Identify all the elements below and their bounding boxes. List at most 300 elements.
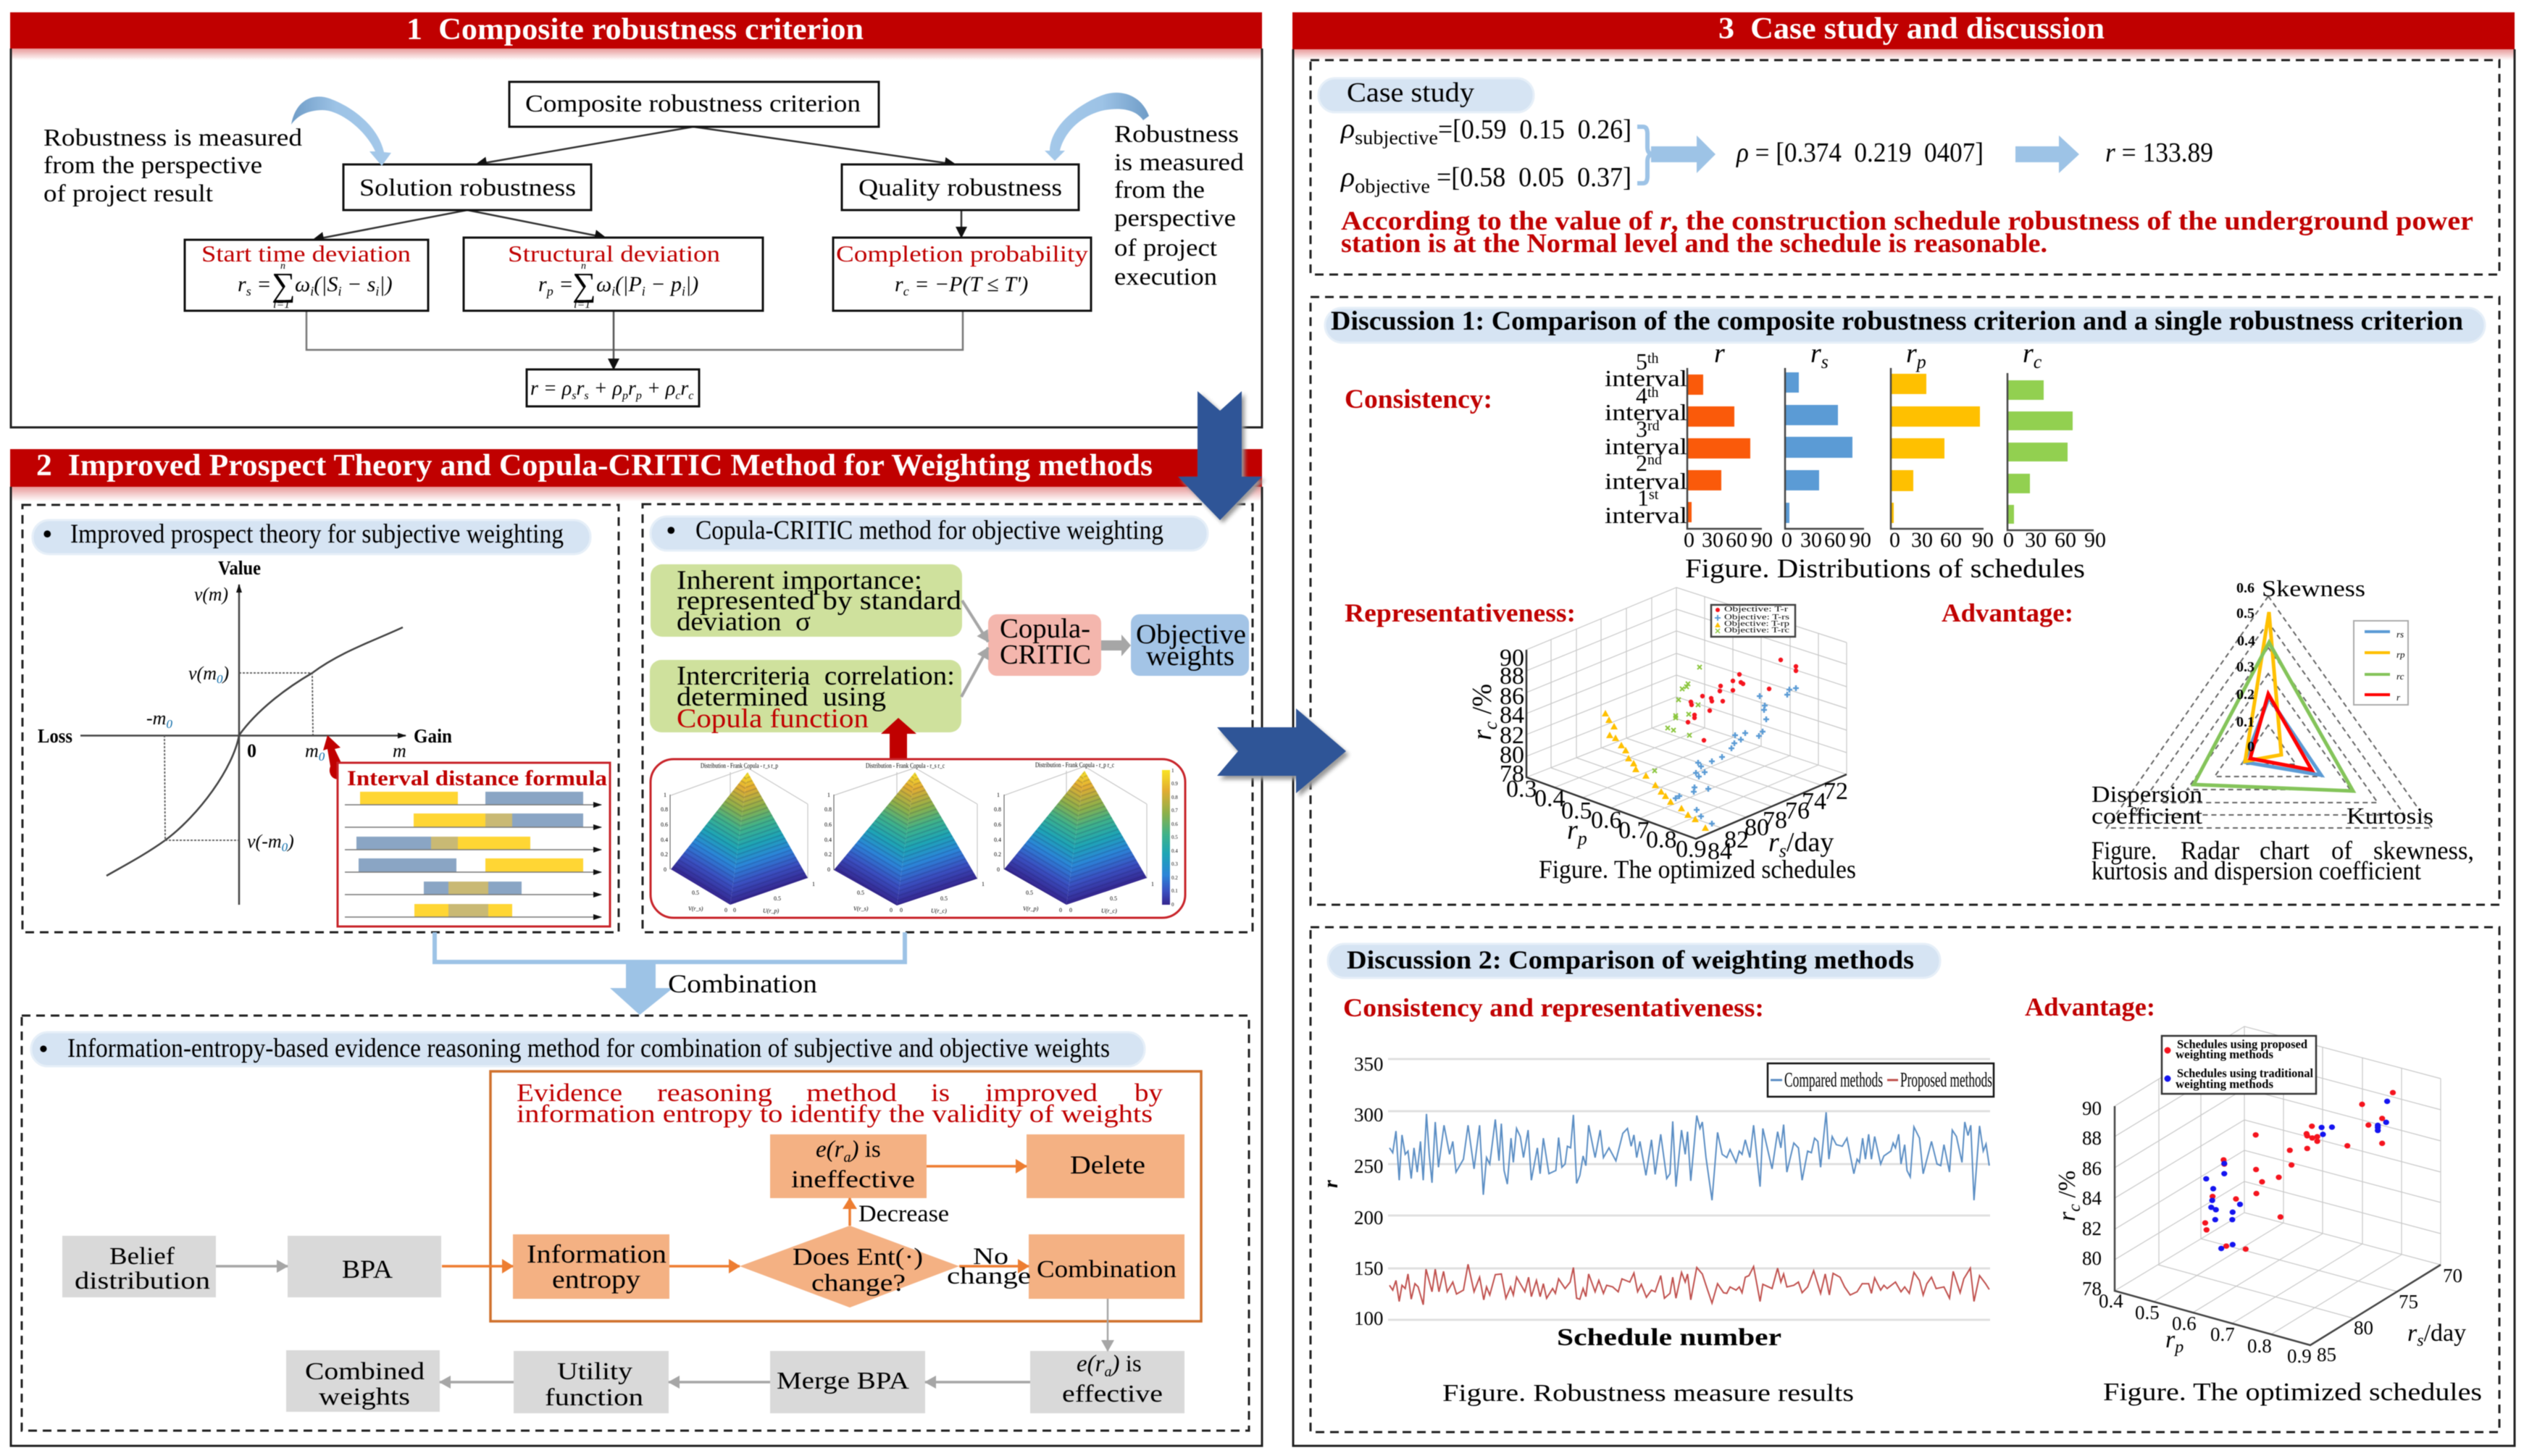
weights: objective: =[0.58 0.05 0.37] — [1437, 162, 1631, 193]
box: completion probability: r — [895, 272, 903, 296]
bars: rs: 90 — [1850, 528, 1871, 552]
arrows to copula-critic — [961, 601, 988, 697]
chart: value function: v(-m — [247, 831, 282, 852]
box: start time deviation: (|S — [314, 272, 338, 296]
axis ticks: 86 — [2082, 1158, 2102, 1179]
box: BPA: BPA — [342, 1255, 393, 1284]
caption: kurtosis and dispersion coefficient — [2092, 856, 2421, 885]
axis labels — [2092, 575, 2433, 829]
panel 1 header — [10, 12, 1262, 60]
bars: rc — [2003, 338, 2106, 552]
box: structural deviation: |) — [685, 272, 698, 296]
bars: rs: r — [1810, 338, 1821, 369]
surface 1: 0.4 — [661, 837, 668, 843]
axis ticks: 200 — [1354, 1207, 1384, 1229]
box: copula-critic: CRITIC — [1000, 640, 1091, 670]
box: structural deviation: r — [538, 272, 547, 296]
box: utility function: function — [545, 1384, 643, 1411]
interval labels: 4 — [1636, 382, 1647, 409]
axis ticks: 78 — [1763, 807, 1787, 834]
caption: of — [2331, 836, 2352, 865]
chart: value function — [38, 557, 452, 905]
box: ineffective: is — [858, 1137, 881, 1163]
box: solution robustness — [343, 164, 591, 210]
box: combination — [1029, 1234, 1184, 1299]
series: objective T-rs (blue) — [1673, 685, 1799, 827]
box: structural deviation: n — [581, 261, 586, 272]
box: objective weights: Objective — [1136, 619, 1246, 650]
heading: case study: Case study — [1347, 78, 1474, 108]
box: start time deviation: |) — [379, 272, 393, 296]
axis ticks: 0.7 — [2210, 1323, 2235, 1345]
chart: value function: m — [305, 740, 319, 761]
bars: rp: 60 — [1940, 528, 1962, 552]
arrow: section 2 to section 3 — [1217, 708, 1346, 793]
box: structural deviation: ∑ — [572, 266, 596, 303]
axis ticks: 84 — [1500, 702, 1524, 729]
bars: rs: 60 — [1824, 528, 1846, 552]
interval labels: th — [1647, 385, 1659, 401]
box: composite robustness criterion — [509, 82, 879, 127]
axis ticks: 82 — [1500, 722, 1524, 749]
axis ticks: 75 — [2399, 1291, 2418, 1313]
note: evidence reasoning improvement: information entropy to identify the validity of weights — [517, 1100, 1153, 1128]
arrow: section 1 to section 2 — [1178, 391, 1262, 520]
box: ineffective — [770, 1134, 927, 1198]
axis labels: c — [2065, 1204, 2084, 1212]
legend: Schedules using proposed — [2177, 1037, 2308, 1051]
surface 3 — [994, 761, 1154, 914]
series: proposed methods — [1390, 1264, 1989, 1305]
series: objective T-rc (green) — [1652, 665, 1702, 773]
axis ticks: 72 — [1823, 778, 1848, 805]
icon: red pointer arrow — [323, 735, 344, 779]
heading: discussion 1: Discussion 1: Comparison of the composite robustness criterion and a single robustness criterion — [1331, 306, 2463, 336]
box: composite formula: s — [584, 390, 589, 402]
box: information entropy — [513, 1234, 669, 1299]
grey flow arrows — [216, 1266, 1108, 1382]
box: intercriteria correlation — [650, 660, 961, 734]
box: structural deviation: p — [546, 284, 553, 298]
box: structural deviation: i — [611, 284, 615, 298]
bars: r: r — [1714, 338, 1725, 369]
panel 3 header: 3 Case study and discussion — [1718, 12, 2105, 46]
legend: Compared methods — [1784, 1069, 1883, 1092]
axis labels: c — [1480, 721, 1501, 729]
colour bar: 0.3 — [1171, 861, 1178, 867]
axis labels: /day — [1787, 827, 1834, 858]
bars: rs — [1781, 338, 1871, 552]
box: merge BPA — [770, 1351, 925, 1413]
surface 3: V(r_p) — [1023, 905, 1039, 912]
legend — [1768, 1063, 1994, 1097]
interval labels: 5 — [1636, 348, 1647, 375]
surface 1: 0 — [724, 907, 727, 913]
combination bracket and arrow: Combination — [668, 969, 817, 998]
caption — [2092, 836, 2474, 885]
callout: interval distance formula: Interval distance formula — [347, 766, 607, 790]
bars: rc: 60 — [2055, 528, 2076, 552]
caption: Figure. Distributions of schedules — [1685, 554, 2085, 584]
colour bar: 0.2 — [1171, 875, 1178, 881]
caption: Radar — [2181, 836, 2239, 865]
box: structural deviation: i=1 — [574, 298, 590, 311]
colour bar: 1 — [1171, 768, 1174, 774]
chart: value function: Value — [218, 557, 261, 579]
box: objective weights — [1131, 614, 1249, 676]
box: composite robustness criterion: Composite robustness criterion — [525, 91, 861, 117]
axis ticks: 80 — [1744, 814, 1769, 841]
legend: r — [2396, 692, 2401, 703]
legend — [2162, 1036, 2316, 1094]
box: quality robustness — [842, 164, 1079, 210]
box: effective: effective — [1062, 1381, 1163, 1407]
label: advantage: Advantage: — [2025, 992, 2155, 1021]
chart: value function: ) — [286, 831, 294, 852]
bars: r: 60 — [1726, 528, 1747, 552]
bars: r: 30 — [1702, 528, 1723, 552]
chart: optimized schedules 3D scatter — [1467, 587, 1856, 884]
heading: improved prospect theory: Improved prospect theory for subjective weighting — [70, 519, 564, 549]
radial ticks: 0.1 — [2236, 714, 2255, 730]
chart: value function: 0 — [166, 717, 172, 731]
axis labels: p — [2173, 1338, 2184, 1357]
axis ticks: 82 — [2082, 1218, 2102, 1239]
heading: evidence reasoning: Information-entropy-based evidence reasoning method for combination of subjective and objective weights — [67, 1034, 1110, 1063]
box: ineffective: ineffective — [791, 1166, 915, 1193]
chart: value function: 0 — [282, 840, 288, 854]
box: intercriteria correlation: determined using — [677, 682, 886, 712]
heading: copula-critic: Copula-CRITIC method for objective weighting — [695, 516, 1163, 545]
box: start time deviation: n — [280, 261, 285, 272]
axis ticks: 0.6 — [2172, 1313, 2197, 1334]
heading: evidence reasoning: • — [39, 1036, 48, 1063]
bars: rc: 90 — [2084, 528, 2106, 552]
chart: value function: Loss — [38, 725, 72, 747]
legend: rc — [2396, 671, 2404, 682]
axis ticks: 76 — [1785, 798, 1810, 824]
note: project execution: execution — [1114, 264, 1217, 290]
axis labels: Dispersion — [2092, 781, 2202, 807]
surface 2 — [824, 762, 985, 914]
axis ticks: 0.4 — [2099, 1290, 2123, 1312]
axis ticks: 78 — [1500, 761, 1524, 787]
caption: skewness, — [2373, 836, 2474, 865]
chart: value function: Gain — [414, 725, 452, 747]
caption: Figure. The optimized schedules — [1539, 855, 1856, 884]
surface 2: 1 — [827, 792, 830, 798]
sub-panel: copula-critic — [643, 504, 1253, 932]
colour bar — [1162, 768, 1178, 908]
box: combined weights: Combined — [305, 1358, 425, 1385]
panel 3: case study and discussion — [1292, 12, 2515, 1446]
axis ticks: 0.7 — [1618, 817, 1649, 844]
axis ticks: 0.8 — [2247, 1335, 2272, 1357]
box: composite formula: c — [688, 390, 693, 402]
box: combination: Combination — [1037, 1256, 1177, 1283]
surface 3: Distribution - Frank Copula - r_p r_c — [1035, 761, 1114, 769]
series: r — [2250, 694, 2312, 770]
label: consistency: Consistency: — [1345, 385, 1492, 414]
series: compared methods — [1390, 1113, 1989, 1200]
axis ticks: 80 — [1500, 742, 1524, 769]
decision: does entropy change: change? — [811, 1270, 906, 1297]
box: composite formula: r — [576, 377, 584, 400]
sub-panel: discussion 2 — [1311, 927, 2499, 1432]
panel 2: weighting methods — [10, 449, 1262, 1446]
arrow to result — [2015, 135, 2079, 173]
axis ticks: 250 — [1354, 1155, 1384, 1177]
axis ticks: 80 — [2354, 1317, 2373, 1339]
combination bracket and arrow — [435, 932, 905, 1015]
series: objective T-r (red) — [1686, 658, 1798, 742]
interval labels: interval — [1605, 468, 1687, 494]
bracket and arrow to combined weights — [1637, 127, 1716, 183]
surface 3: 0.6 — [994, 821, 1001, 828]
y axis label: r — [1320, 1179, 1342, 1188]
decision: does entropy change — [740, 1226, 959, 1308]
colour bar: 0.7 — [1171, 808, 1178, 813]
note: evidence reasoning improvement: by — [1134, 1079, 1163, 1107]
label: no change: No — [973, 1244, 1008, 1270]
box: belief distribution: Belief — [109, 1243, 175, 1270]
axis labels: r — [1768, 827, 1779, 858]
box: utility function — [514, 1351, 669, 1413]
surface 2: 0.8 — [824, 806, 832, 813]
box: composite formula: + ρ — [589, 377, 622, 400]
legend: Schedules using traditional — [2177, 1066, 2313, 1080]
surface 3: 0.8 — [994, 806, 1001, 813]
box: start time deviation: = — [251, 272, 271, 296]
note: project result: Robustness is measured — [43, 125, 302, 151]
chart: value function: ) — [221, 663, 229, 684]
arrow: red up arrow — [881, 718, 916, 760]
sub-panel: discussion 1 — [1311, 297, 2499, 905]
label: no change — [947, 1244, 1031, 1289]
box: start time deviation — [185, 240, 428, 311]
box: ineffective: e(r — [816, 1137, 843, 1163]
surface 1: 0.5 — [774, 895, 781, 902]
heading: improved prospect theory: • — [43, 519, 52, 548]
colour bar: 0.6 — [1171, 821, 1178, 827]
caption: Figure. — [2092, 836, 2157, 865]
interval labels: 1 — [1637, 485, 1649, 511]
box: combined weights — [286, 1350, 440, 1412]
note: evidence reasoning improvement — [517, 1079, 1163, 1128]
axis ticks: 0.3 — [1506, 776, 1537, 803]
axis ticks: 0.5 — [2135, 1302, 2160, 1323]
box: composite formula: p — [622, 390, 628, 402]
box: information entropy: entropy — [552, 1265, 640, 1294]
box: completion probability — [833, 238, 1091, 311]
surface 1: 0.5 — [692, 890, 699, 896]
weights: subjective: =[0.59 0.15 0.26] — [1438, 114, 1631, 145]
bars: rp: 30 — [1911, 528, 1933, 552]
surface 1: 1 — [812, 881, 815, 887]
radial ticks: 0.4 — [2237, 633, 2255, 649]
interval labels: interval — [1605, 433, 1687, 459]
sub-panel: evidence reasoning combination — [22, 1016, 1249, 1431]
box: effective: ) — [1110, 1351, 1119, 1377]
axis labels — [2054, 1171, 2466, 1357]
axis ticks: 84 — [1708, 838, 1732, 865]
interval labels: nd — [1647, 452, 1662, 468]
bars: rc: c — [2034, 351, 2042, 372]
box: composite formula: r = ρ — [530, 377, 572, 400]
surface 2: 1 — [982, 881, 985, 887]
axis labels: Skewness — [2262, 575, 2365, 601]
box: inherent importance — [651, 564, 962, 637]
series: proposed weighting — [2202, 1090, 2396, 1252]
colour bar: 0 — [1171, 902, 1174, 908]
axis ticks: 0.8 — [1646, 827, 1676, 853]
box: composite formula: s — [572, 390, 576, 402]
radial ticks — [2236, 580, 2255, 755]
legend: Proposed methods — [1900, 1069, 1992, 1092]
bars: rp: 0 — [1889, 528, 1900, 552]
caption: Figure. The optimized schedules — [2103, 1378, 2482, 1406]
surface 3: 1 — [997, 792, 1000, 798]
box: start time deviation: ω — [295, 272, 310, 296]
axis ticks: 88 — [1500, 663, 1524, 690]
note: evidence reasoning improvement: reasoning — [657, 1079, 772, 1107]
series: rp — [2245, 612, 2281, 761]
radial ticks: 0.5 — [2236, 606, 2255, 622]
chart: value function: -m — [146, 708, 166, 729]
axis ticks: 150 — [1354, 1258, 1384, 1279]
bars: r: 0 — [1684, 528, 1694, 552]
box: delete: Delete — [1070, 1150, 1145, 1179]
box: completion probability: c — [903, 284, 909, 298]
note: project result — [43, 125, 302, 207]
radial ticks: 0.3 — [2236, 659, 2255, 675]
axis labels: /day — [2424, 1320, 2466, 1347]
box: structural deviation: Structural deviation — [508, 240, 720, 267]
caption: Figure. Robustness measure results — [1442, 1380, 1854, 1407]
surface 3: U(r_c) — [1101, 908, 1117, 914]
note: project execution: is measured — [1114, 149, 1244, 176]
box: combined weights: weights — [319, 1384, 410, 1410]
box: structural deviation: − p — [645, 272, 682, 296]
legend — [1711, 605, 1795, 637]
surface 1: 1 — [664, 792, 666, 798]
chart: robustness measure results — [1320, 1053, 1994, 1407]
surface 3: 0 — [997, 866, 1000, 873]
axis ticks: 0.9 — [2287, 1345, 2312, 1367]
legend: weighting methods — [2176, 1047, 2273, 1061]
bars: r — [1684, 338, 1773, 552]
note: project execution: of project — [1114, 235, 1218, 262]
note: project execution: Robustness — [1114, 121, 1239, 148]
heading: case study — [1319, 78, 1534, 112]
box: completion probability: Completion probability — [836, 240, 1088, 267]
axis labels: coefficient — [2092, 803, 2202, 829]
surface 2: 0.5 — [940, 895, 948, 902]
panel 1: composite robustness criterion — [10, 12, 1262, 427]
box: copula-critic — [988, 614, 1101, 676]
box: composite formula: + ρ — [642, 377, 675, 400]
box: belief distribution: distribution — [75, 1268, 210, 1294]
panel 2 header: 2 Improved Prospect Theory and Copula-CRITIC Method for Weighting methods — [36, 449, 1153, 482]
surface 3: 0.4 — [994, 837, 1001, 843]
note: evidence reasoning improvement: method — [806, 1079, 898, 1107]
box: copula-critic: Copula- — [1000, 614, 1090, 644]
box: structural deviation: ω — [596, 272, 611, 296]
chart: distributions of schedules — [1605, 338, 2106, 584]
label: no change: change — [947, 1263, 1031, 1289]
box: intercriteria correlation: Intercriteria correlation: — [677, 661, 955, 691]
axis ticks: 80 — [2082, 1247, 2102, 1269]
box: BPA — [288, 1236, 441, 1297]
box: start time deviation: s — [246, 284, 251, 298]
icon: right curved arrow — [1045, 93, 1149, 161]
surface 1: 0 — [664, 866, 666, 873]
decision: does entropy change: Does Ent(·) — [793, 1244, 923, 1271]
chart: radar — [2092, 575, 2474, 885]
box: structural deviation: i — [642, 284, 645, 298]
box: belief distribution — [62, 1236, 216, 1297]
chart: value function: v(m) — [194, 584, 228, 605]
legend — [2354, 621, 2408, 705]
region: improved evidence reasoning — [442, 1071, 1201, 1321]
series: traditional weighting — [2203, 1099, 2390, 1251]
interval labels: interval — [1605, 365, 1687, 391]
label: representativeness: Representativeness: — [1345, 598, 1576, 627]
surface 1: 0.2 — [661, 851, 668, 858]
conclusion — [1341, 206, 2473, 259]
bars: rs: s — [1821, 351, 1829, 372]
axis labels — [1467, 684, 1834, 861]
box: composite formula: p — [635, 390, 642, 402]
bars: rp — [1889, 338, 1994, 552]
axis ticks: 0.9 — [1676, 836, 1707, 863]
surface 1: U(r_p) — [763, 908, 780, 914]
axis ticks: 86 — [1500, 683, 1524, 710]
weights: subjective — [1340, 114, 1631, 148]
axis ticks: 100 — [1354, 1308, 1384, 1329]
bars: rc: 30 — [2025, 528, 2047, 552]
bars: r: 90 — [1751, 528, 1773, 552]
box: intercriteria correlation: Copula function — [677, 704, 869, 734]
box: start time deviation: − s — [341, 272, 375, 296]
surface 3: 1 — [1151, 881, 1154, 887]
surface 1: 0 — [733, 907, 736, 913]
arrow: copula-critic to objective weights — [1101, 635, 1131, 656]
bars: rp: r — [1906, 338, 1917, 369]
interval labels: st — [1649, 487, 1659, 503]
interval labels: interval — [1605, 502, 1687, 528]
box: ineffective: ) — [849, 1137, 858, 1163]
box: structural deviation: i — [682, 284, 685, 298]
weights: objective — [1340, 162, 1631, 197]
x axis label: Schedule number — [1557, 1324, 1781, 1351]
panel 1 header: 1 Composite robustness criterion — [406, 13, 864, 46]
axis ticks: 78 — [2082, 1278, 2102, 1300]
orange flow arrows — [442, 1166, 1029, 1266]
surface 2: 0.2 — [824, 851, 832, 858]
label: advantage: Advantage: — [1942, 598, 2073, 627]
radial ticks: 0.2 — [2236, 687, 2255, 703]
surface 1: Distribution - Frank Copula - r_s r_p — [701, 762, 778, 769]
axis labels: /% — [2054, 1171, 2081, 1204]
series: rs — [2244, 698, 2321, 775]
flow arrows — [306, 127, 963, 369]
icon: left curved arrow — [291, 96, 391, 166]
box: composite formula: c — [675, 390, 680, 402]
colour bar: 0.1 — [1171, 888, 1178, 894]
legend: Objective: T-rp — [1724, 619, 1790, 628]
box: start time deviation: i — [338, 284, 341, 298]
